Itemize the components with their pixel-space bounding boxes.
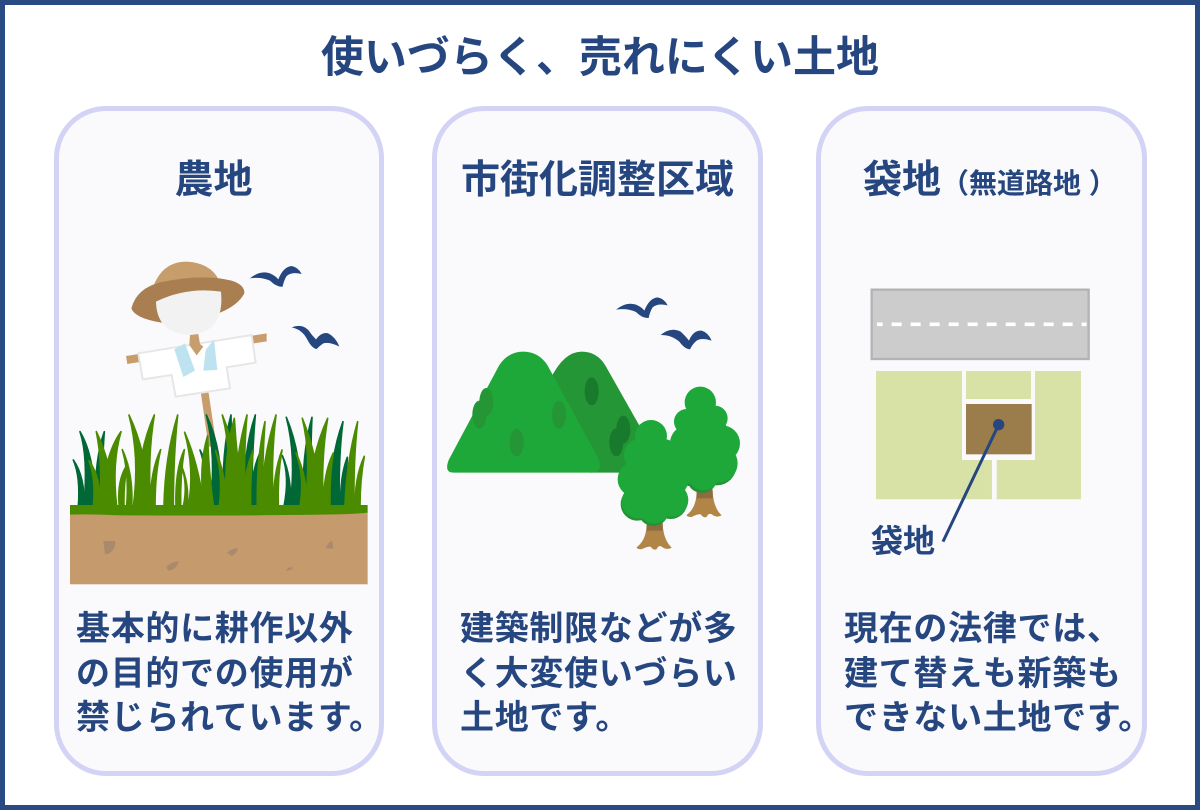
panel: farmland [54, 106, 384, 776]
icon: birds [616, 297, 712, 349]
road [872, 290, 1089, 359]
heading: landlocked lot: 袋地（無道路地 ） [863, 159, 1117, 202]
text: landlocked lot description [844, 610, 1153, 737]
icon: front tree [618, 420, 688, 550]
title: 使いづらく、売れにくい土地 [321, 34, 879, 82]
icon: mountains [447, 352, 640, 473]
icon: scarecrow [126, 262, 267, 447]
icon: back tree [670, 387, 740, 517]
text: landlocked lot description: できない土地です。 [844, 699, 1153, 737]
icon: bird [292, 326, 339, 349]
heading: farmland: 農地 [174, 159, 252, 202]
label: landlocked lot: 袋地 [871, 523, 935, 559]
leader line [943, 419, 1004, 542]
text: farmland description [76, 610, 384, 737]
text: farmland description: の目的での使用が [76, 654, 354, 692]
text: urbanization area description: く大変使いづらい [460, 654, 738, 692]
heading: urbanization control area: 市街化調整区域 [461, 159, 734, 202]
panel: urbanization control area [432, 106, 763, 776]
text: urbanization area description: 建築制限などが多 [460, 610, 738, 648]
text: farmland description: 基本的に耕作以外 [76, 610, 354, 648]
icon: bird [250, 266, 302, 287]
text: landlocked lot description: 建て替えも新築も [844, 654, 1122, 692]
text: landlocked lot description: 現在の法律では、 [844, 610, 1122, 648]
soil [70, 512, 368, 584]
grass [70, 415, 368, 516]
panel: landlocked lot [816, 106, 1147, 776]
landlocked plot [966, 404, 1032, 454]
text: urbanization area description [460, 610, 738, 737]
text: farmland description: 禁じられています。 [76, 699, 384, 737]
text: urbanization area description: 土地です。 [460, 699, 630, 737]
surrounding plots [876, 371, 1081, 499]
